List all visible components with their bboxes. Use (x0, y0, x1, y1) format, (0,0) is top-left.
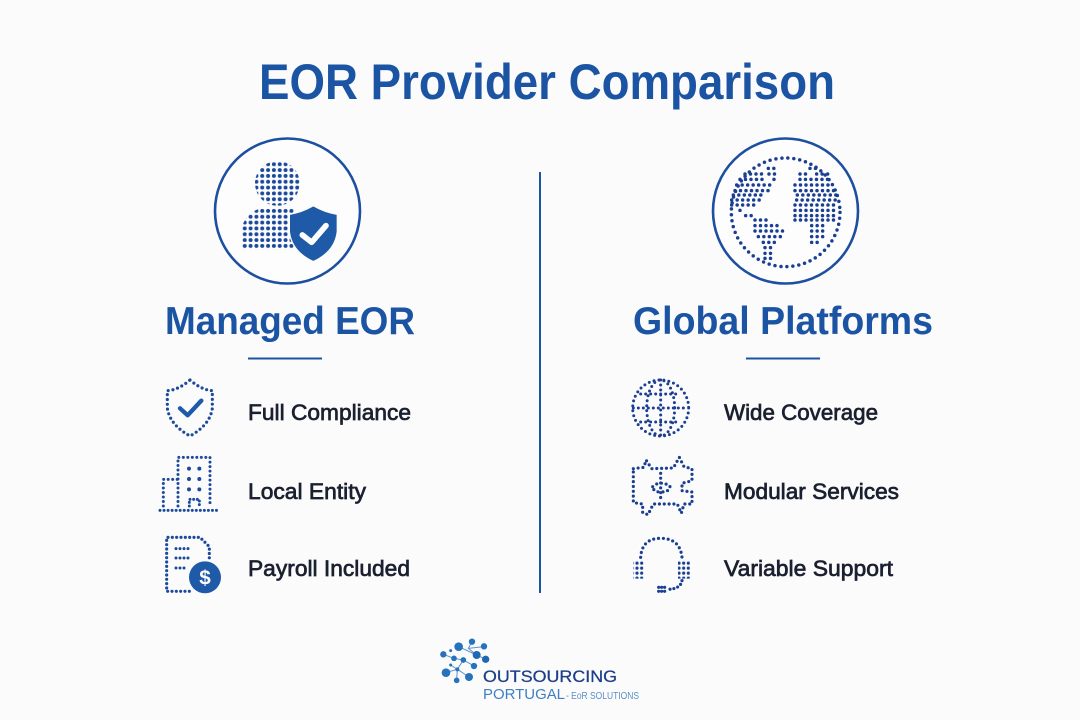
heading: Managed EOR: Managed EOR (165, 300, 415, 343)
heading: Global Platforms: Global Platforms (633, 300, 933, 343)
label: Wide Coverage: Wide Coverage (724, 400, 878, 425)
panel: managed EOR (160, 138, 415, 593)
logo: Outsourcing Portugal (440, 638, 639, 703)
label: Payroll Included: Payroll Included (248, 556, 410, 581)
center divider (539, 172, 541, 593)
icon: puzzle piece (633, 457, 692, 515)
icon: shield check (167, 380, 212, 436)
icon: building (160, 457, 217, 510)
title: EOR Provider Comparison (259, 54, 835, 110)
icon: payroll document: $ (199, 567, 211, 590)
logo descriptor: - EoR SOLUTIONS (566, 691, 639, 702)
heading underline (746, 358, 820, 360)
label: Variable Support: Variable Support (724, 556, 894, 581)
label: Modular Services: Modular Services (724, 479, 899, 504)
logo network mark (440, 638, 489, 683)
icon: person with shield (215, 138, 360, 284)
heading underline (248, 358, 322, 360)
icon: dotted globe (713, 138, 858, 284)
icon: headset (633, 538, 690, 591)
label: Full Compliance: Full Compliance (248, 400, 411, 425)
icon: wire globe (633, 380, 689, 436)
logo wordmark: OUTSOURCING (483, 667, 617, 686)
logo tagline: PORTUGAL (483, 686, 565, 703)
panel: global platforms (633, 138, 933, 591)
icon: payroll document (167, 537, 221, 593)
label: Local Entity: Local Entity (248, 479, 367, 504)
